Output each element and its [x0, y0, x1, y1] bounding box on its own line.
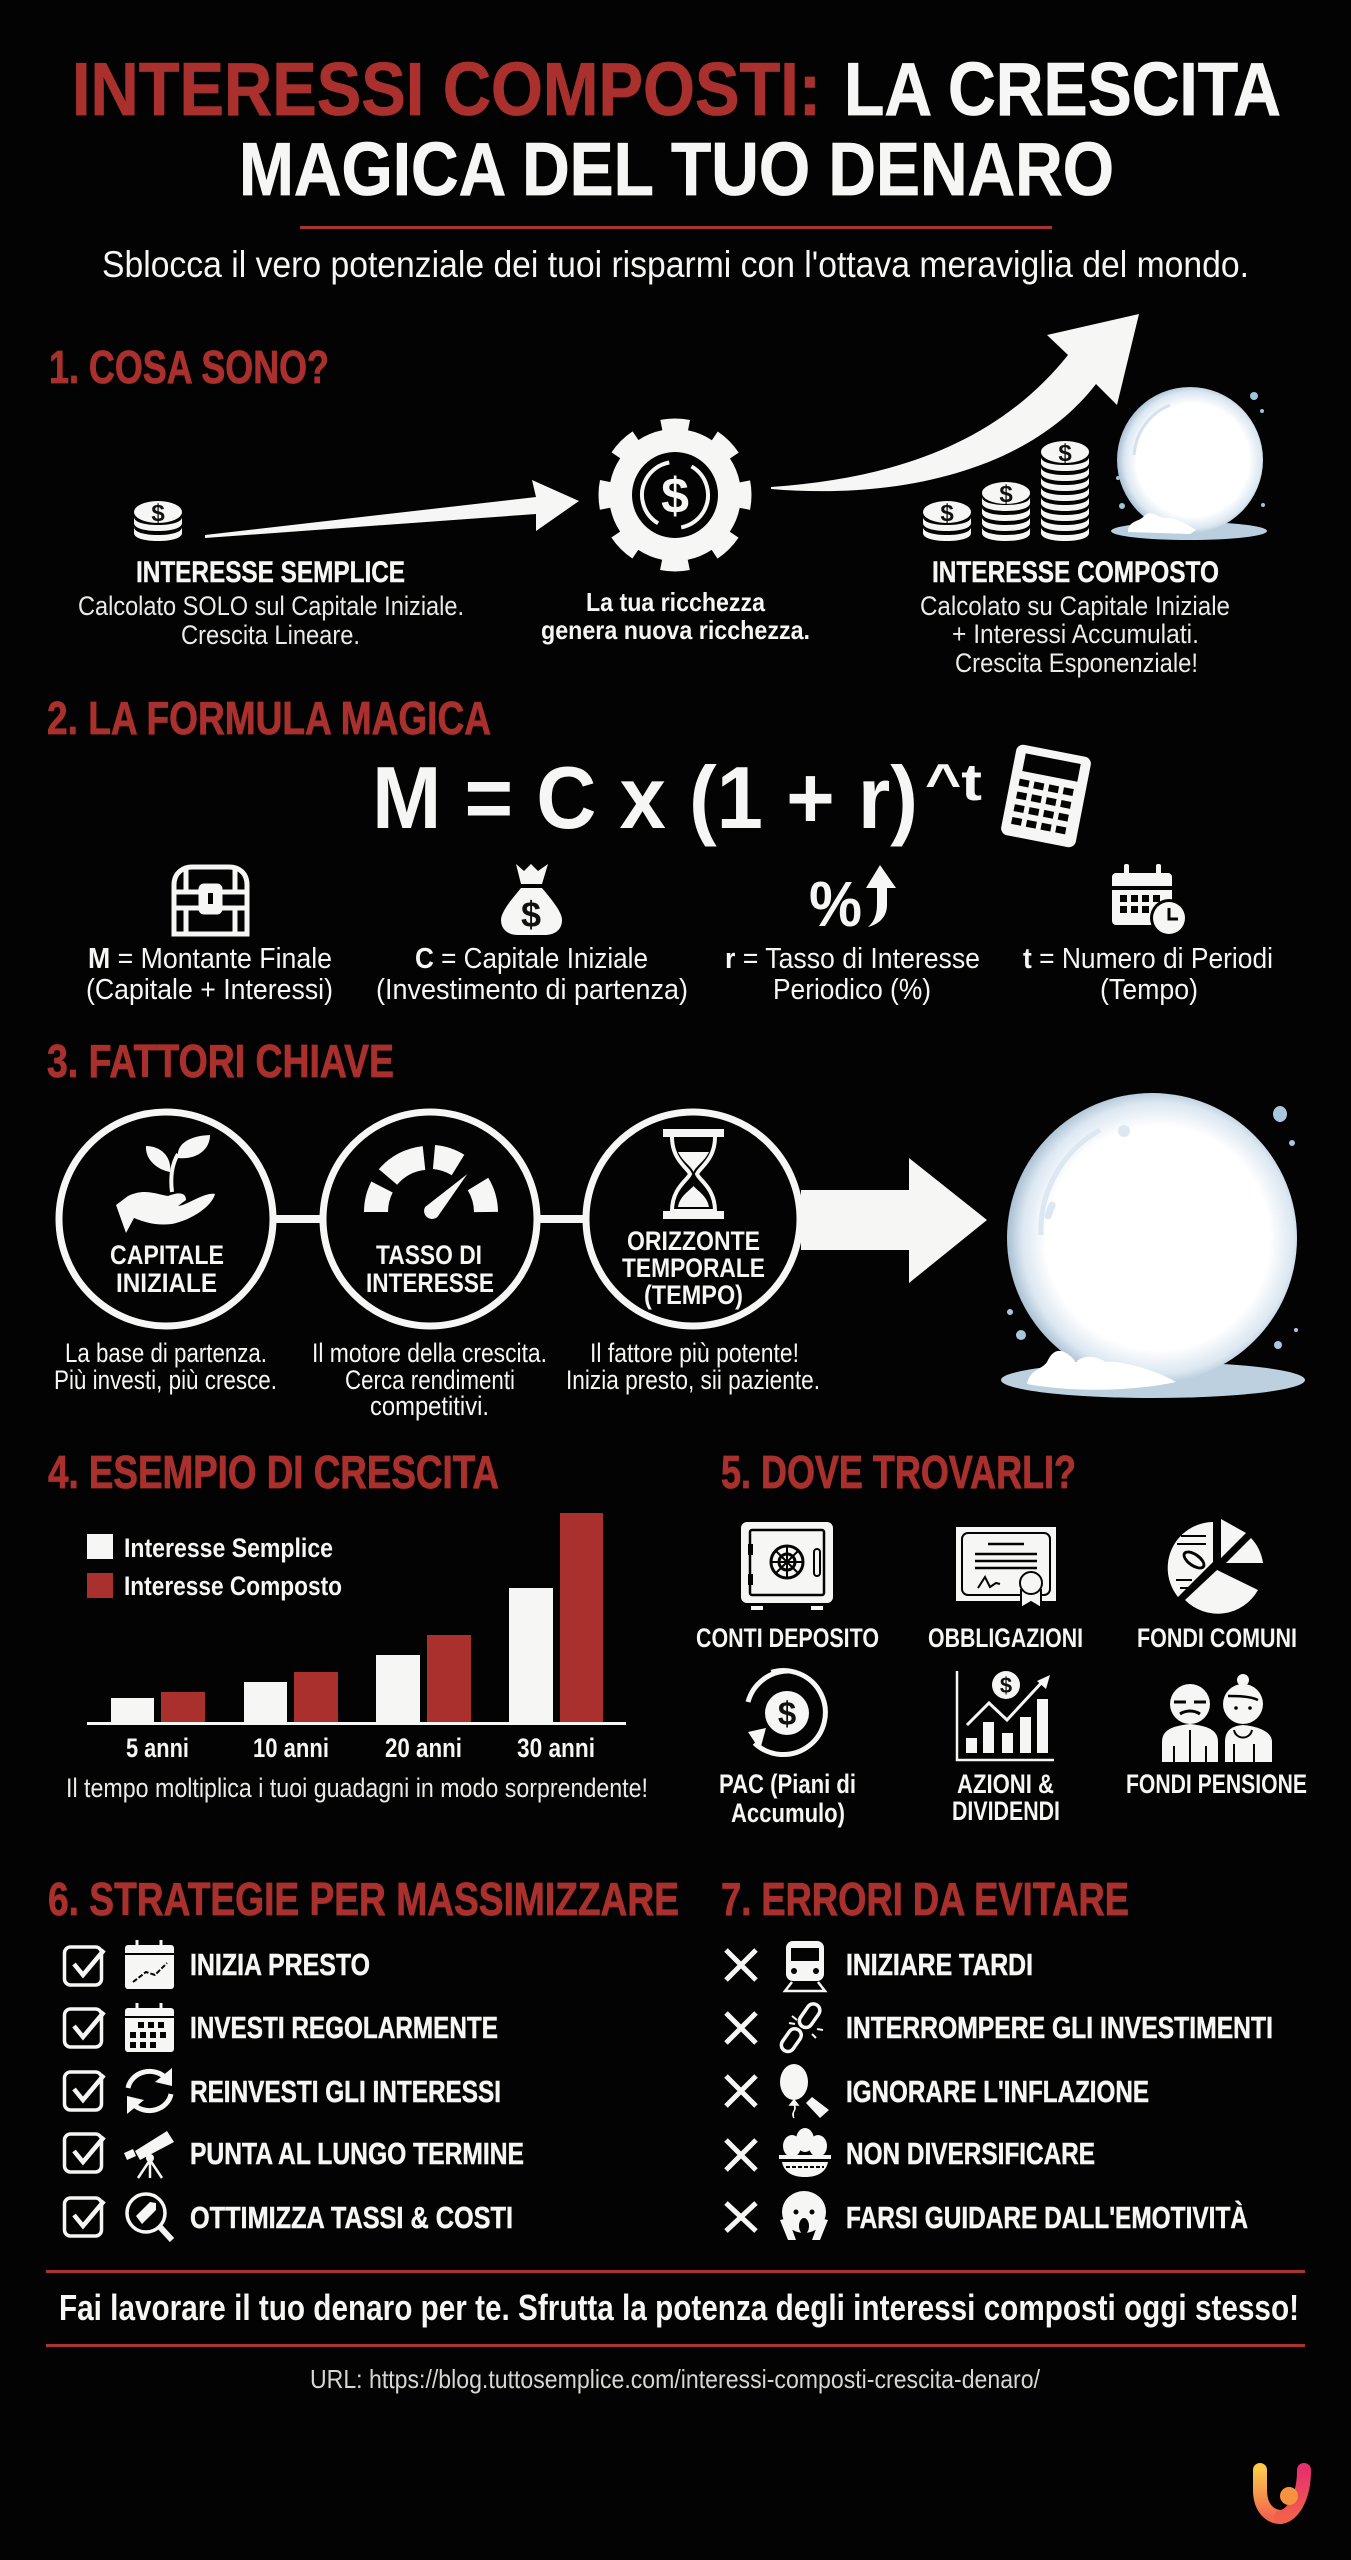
text: azioni e dividendi: AZIONI &	[957, 1769, 1054, 1799]
text: capitale: C = Capitale Iniziale	[415, 943, 648, 975]
arrow: linear growth	[205, 480, 579, 538]
factor: orizzonte temporale: ORIZZONTE	[627, 1226, 760, 1256]
text: motore della crescita: Cerca rendimenti	[345, 1365, 515, 1395]
text: periodi: (Tempo)	[1100, 974, 1198, 1006]
text: base di partenza: La base di partenza.	[65, 1338, 267, 1368]
text: interesse semplice: Crescita Lineare.	[181, 620, 360, 650]
panel: 6 strategie	[48, 1873, 679, 2240]
text: ricchezza	[541, 587, 810, 645]
text: base di partenza: Più investi, più cresce.	[54, 1365, 277, 1395]
bar chart	[87, 1513, 626, 1763]
icon: recurring plan: $	[778, 1695, 796, 1732]
chart caption: Il tempo moltiplica i tuoi guadagni in modo sorprendente!	[66, 1773, 648, 1803]
text: motore della crescita	[312, 1338, 547, 1421]
item: reinvesti gli interessi: REINVESTI GLI INTERESSI	[190, 2074, 501, 2109]
factor: capitale iniziale	[59, 1112, 273, 1326]
icon: percent up	[809, 865, 896, 940]
factor: tasso di interesse: TASSO DI	[376, 1240, 482, 1270]
heading: errori da evitare: 7. ERRORI DA EVITARE	[721, 1873, 1129, 1925]
heading: strategie per massimizzare: 6. STRATEGIE PER MASSIMIZZARE	[48, 1873, 679, 1925]
icon: calculator	[1000, 744, 1092, 848]
item: non diversificare: NON DIVERSIFICARE	[846, 2136, 1095, 2171]
text: fondi pensione: FONDI PENSIONE	[1126, 1769, 1307, 1799]
text: interesse semplice	[78, 556, 464, 650]
factor: orizzonte temporale	[586, 1112, 800, 1326]
icon: small coin stack	[134, 500, 182, 541]
text: motore della crescita: Il motore della crescita.	[312, 1338, 547, 1368]
text: capitale: (Investimento di partenza)	[376, 974, 688, 1006]
icon: elderly couple	[1162, 1674, 1272, 1762]
subtitle: Sblocca il vero potenziale dei tuoi risparmi con l'ottava meraviglia del mondo.	[102, 244, 1249, 285]
text: montante: M = Montante Finale	[88, 943, 332, 975]
item: non diversificare	[726, 2128, 1095, 2177]
arrow: exponential growth	[771, 314, 1139, 491]
icon: growing coin stacks: $	[1058, 440, 1072, 467]
factor: orizzonte temporale: TEMPORALE	[622, 1253, 765, 1283]
title	[72, 47, 1281, 211]
text: periodi: t = Numero di Periodi	[1023, 943, 1273, 975]
title: LA CRESCITA	[844, 47, 1281, 131]
bar chart: 30 anni	[517, 1733, 595, 1763]
item: ignorare inflazione: IGNORARE L'INFLAZIONE	[846, 2074, 1149, 2109]
text: fattore potente	[566, 1338, 820, 1395]
heading: cosa sono: 1. COSA SONO?	[49, 341, 329, 393]
item: investi regolarmente: INVESTI REGOLARMENTE	[190, 2010, 498, 2045]
title: INTERESSI COMPOSTI:	[72, 47, 821, 131]
logo	[1260, 2470, 1304, 2517]
text: fattore potente: Inizia presto, sii paziente.	[566, 1365, 820, 1395]
icon: bond certificate	[956, 1527, 1056, 1608]
heading: formula magica: 2. LA FORMULA MAGICA	[47, 692, 491, 744]
item: punta al lungo termine	[64, 2131, 524, 2178]
heading: esempio di crescita: 4. ESEMPIO DI CRESCITA	[48, 1446, 499, 1498]
icon: small snowball	[1111, 387, 1267, 540]
text: tasso: Periodico (%)	[773, 974, 931, 1006]
icon: percent up: %	[809, 868, 862, 940]
text: interesse composto	[920, 556, 1230, 678]
text: conti deposito: CONTI DEPOSITO	[696, 1623, 879, 1653]
panel: 4 esempio di crescita	[48, 1446, 648, 1803]
legend: Interesse Composto	[124, 1571, 342, 1601]
bar chart: 10 anni	[253, 1733, 329, 1763]
item: investi regolarmente	[64, 2003, 498, 2052]
legend	[87, 1533, 342, 1601]
icon: growing coin stacks: $	[999, 481, 1013, 508]
item: reinvesti gli interessi	[64, 2068, 501, 2114]
text: montante	[86, 943, 333, 1006]
icon: money bag: $	[521, 894, 541, 935]
icon: recurring plan	[748, 1667, 829, 1757]
text: base di partenza	[54, 1338, 277, 1395]
bar chart: 5 anni	[126, 1733, 189, 1763]
panel: 2 formula	[47, 692, 1273, 1006]
item: ignorare inflazione	[726, 2064, 1149, 2118]
icon: growing coin stacks	[923, 440, 1089, 541]
item: inizia presto	[64, 1940, 370, 1989]
text: capitale	[376, 943, 688, 1006]
formula: M = C x (1 + r)	[372, 748, 918, 847]
text: interesse composto: Calcolato su Capitale Iniziale	[920, 591, 1230, 621]
text: motore della crescita: competitivi.	[370, 1391, 489, 1421]
icon: big snowball	[1001, 1093, 1305, 1398]
panel: 7 errori	[721, 1873, 1273, 2240]
icon: treasure chest	[174, 867, 247, 934]
icon: gear with dollar: $	[661, 468, 689, 524]
item: farsi guidare emotivita: FARSI GUIDARE DALL'EMOTIVITÀ	[846, 2200, 1248, 2235]
text: periodi	[1023, 943, 1273, 1006]
text: interesse semplice: Calcolato SOLO sul Capitale Iniziale.	[78, 591, 464, 621]
icon: stock chart	[957, 1671, 1054, 1760]
text: interesse composto: INTERESSE COMPOSTO	[932, 556, 1219, 589]
factor: capitale iniziale: INIZIALE	[116, 1268, 217, 1298]
bar chart: 20 anni	[385, 1733, 462, 1763]
panel: 3 fattori chiave	[47, 1035, 1305, 1421]
item: farsi guidare emotivita	[726, 2191, 1248, 2240]
item: iniziare tardi: INIZIARE TARDI	[846, 1947, 1033, 1982]
panel: 5 dove trovarli	[696, 1446, 1307, 1828]
text: pac: PAC (Piani di	[719, 1769, 856, 1799]
text: montante: (Capitale + Interessi)	[86, 974, 333, 1006]
text: pac: Accumulo)	[731, 1798, 845, 1828]
item: ottimizza tassi e costi: OTTIMIZZA TASSI & COSTI	[190, 2200, 513, 2235]
factor: capitale iniziale: CAPITALE	[110, 1240, 224, 1270]
heading: dove trovarli: 5. DOVE TROVARLI?	[721, 1446, 1076, 1498]
formula: ^t	[925, 754, 982, 812]
arrow: into snowball	[801, 1158, 987, 1283]
title: MAGICA DEL TUO DENARO	[239, 127, 1114, 211]
icon: calendar clock	[1112, 864, 1188, 937]
text: ricchezza: genera nuova ricchezza.	[541, 615, 810, 645]
text: obbligazioni: OBBLIGAZIONI	[928, 1623, 1083, 1653]
text: tasso: r = Tasso di Interesse	[725, 943, 980, 975]
item: punta al lungo termine: PUNTA AL LUNGO TERMINE	[190, 2136, 524, 2171]
icon: growing coin stacks: $	[940, 500, 954, 527]
text: interesse composto: Crescita Esponenziale!	[955, 648, 1198, 678]
heading: fattori chiave: 3. FATTORI CHIAVE	[47, 1035, 394, 1087]
text: azioni e dividendi	[952, 1769, 1060, 1826]
text: pac	[719, 1769, 856, 1828]
factor: tasso di interesse	[323, 1112, 537, 1326]
item: iniziare tardi	[726, 1941, 1033, 1991]
text: azioni e dividendi: DIVIDENDI	[952, 1796, 1060, 1826]
factor: orizzonte temporale: (TEMPO)	[644, 1280, 743, 1310]
icon: small coin stack: $	[151, 500, 165, 527]
icon: fund pie chart	[1168, 1519, 1263, 1614]
icon: gear with dollar	[606, 426, 744, 564]
text: ricchezza: La tua ricchezza	[586, 587, 765, 617]
icon: stock chart: $	[1000, 1673, 1012, 1698]
legend: Interesse Semplice	[124, 1533, 333, 1563]
item: inizia presto: INIZIA PRESTO	[190, 1947, 370, 1982]
text: fattore potente: Il fattore più potente!	[590, 1338, 799, 1368]
icon: safe	[741, 1522, 833, 1610]
icon: money bag	[501, 864, 562, 935]
url: URL: https://blog.tuttosemplice.com/interessi-composti-crescita-denaro/	[310, 2364, 1041, 2394]
text: fondi comuni: FONDI COMUNI	[1137, 1623, 1297, 1653]
item: ottimizza tassi e costi	[64, 2194, 513, 2240]
text: interesse composto: + Interessi Accumulati.	[952, 619, 1199, 649]
text: interesse semplice: INTERESSE SEMPLICE	[136, 556, 405, 589]
factor: tasso di interesse: INTERESSE	[366, 1268, 494, 1298]
panel: 1 cosa sono	[49, 314, 1267, 678]
item: interrompere gli investimenti	[726, 2001, 1273, 2054]
text: tasso	[725, 943, 980, 1006]
